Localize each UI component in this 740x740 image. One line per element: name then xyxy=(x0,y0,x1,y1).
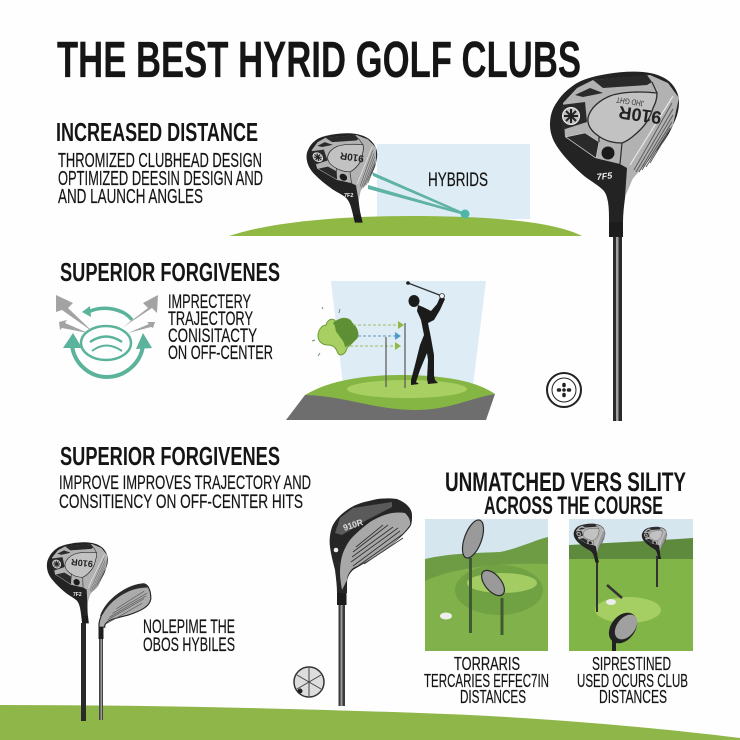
green xyxy=(595,597,661,623)
text block: forgiveness description xyxy=(168,292,273,364)
club two xyxy=(477,566,509,635)
illustration: launch scene xyxy=(229,133,582,236)
club: hybrid xyxy=(98,584,151,720)
caption: hybrid pair xyxy=(143,617,235,656)
ball xyxy=(440,612,452,620)
club: large driver xyxy=(550,72,679,421)
clubs xyxy=(571,524,672,651)
green hill xyxy=(305,375,495,410)
club: driver: 910R xyxy=(70,557,93,569)
club: small driver: 910R xyxy=(339,149,365,164)
panel: fairway scene right xyxy=(569,519,693,651)
text block: forgiveness description: IMPRECTERY xyxy=(168,292,251,313)
sky xyxy=(425,519,548,651)
text block: forgiveness description: ON OFF-CENTER xyxy=(168,343,273,364)
caption: hybrid pair: NOLEPIME THE xyxy=(143,617,235,638)
section: increased distance xyxy=(56,117,263,208)
icon: forgiveness arrows xyxy=(56,295,158,377)
section: superior forgiveness upper xyxy=(56,257,280,377)
text block: forgiveness description: CONISITACTY xyxy=(168,326,257,347)
label: hybrids: HYBRIDS xyxy=(428,170,488,191)
flag poles xyxy=(386,323,405,388)
green hill xyxy=(229,216,582,236)
club: small driver xyxy=(300,133,394,223)
heading: unmatched versatility xyxy=(445,467,686,520)
illustration: golfer scene xyxy=(286,281,495,420)
panel: fairway scene left xyxy=(425,517,548,651)
icon: coin marker xyxy=(547,373,581,407)
stick xyxy=(607,585,622,598)
icon: wheel marker xyxy=(294,667,324,697)
club: center wood xyxy=(330,498,412,706)
lawn xyxy=(569,559,693,651)
green oval xyxy=(347,380,467,398)
hills xyxy=(425,537,548,651)
heading: superior forgiveness: SUPERIOR FORGIVENES xyxy=(60,441,280,471)
caption: hybrid pair: OBOS HYBILES xyxy=(143,635,235,656)
caption: left panel: TERCARIES EFFEC7IN xyxy=(424,671,549,691)
caption: left panel xyxy=(424,654,549,707)
golf ball xyxy=(460,210,470,218)
sky panel xyxy=(377,144,530,219)
caption: left panel: DISTANCES xyxy=(460,687,526,707)
text block: improves trajectory xyxy=(59,473,311,513)
dashed arrows xyxy=(350,321,404,350)
club: large driver: 7F5 xyxy=(596,170,614,182)
far hill xyxy=(569,538,693,562)
club: center wood: 910R xyxy=(342,517,364,533)
club one xyxy=(458,517,488,633)
ground strip xyxy=(0,705,740,740)
club: small driver: 7F2 xyxy=(344,193,353,199)
text block: forgiveness description: TRAJECTORY xyxy=(168,309,253,330)
text block: distance description: OPTIMIZED DEESIN DESIGN AND xyxy=(58,168,263,190)
text block: distance description xyxy=(58,150,263,208)
heading: superior forgiveness: SUPERIOR FORGIVENES xyxy=(60,257,280,287)
clubs: driver and hybrid pair xyxy=(44,542,151,721)
sky panel xyxy=(331,281,486,385)
club: driver xyxy=(44,542,116,721)
launch beams xyxy=(368,172,465,215)
club: large driver: JHD GHT xyxy=(615,95,645,108)
text block: improves trajectory: CONSITIENCY ON OFF-CENTER HITS xyxy=(59,492,303,513)
ball xyxy=(606,599,616,605)
bush target xyxy=(312,307,358,356)
gray ground xyxy=(286,394,495,420)
golfer silhouette xyxy=(406,281,445,385)
section: superior forgiveness lower xyxy=(59,441,311,513)
caption: right panel: SIPRESTINED xyxy=(592,654,671,674)
club: driver: 7F2 xyxy=(73,592,82,598)
sky xyxy=(569,519,693,651)
green xyxy=(455,565,543,615)
text block: distance description: AND LAUNCH ANGLES xyxy=(58,186,203,208)
caption: right panel xyxy=(577,654,688,707)
text block: distance description: THROMIZED CLUBHEAD DESIGN xyxy=(58,150,262,172)
caption: right panel: DISTANCES xyxy=(599,687,667,707)
heading: increased distance: INCREASED DISTANCE xyxy=(56,117,258,147)
club: large driver: 910R xyxy=(617,102,663,128)
text block: improves trajectory: IMPROVE IMPROVES TRAJECTORY AND xyxy=(59,473,311,494)
caption: left panel: TORRARIS xyxy=(454,654,520,674)
